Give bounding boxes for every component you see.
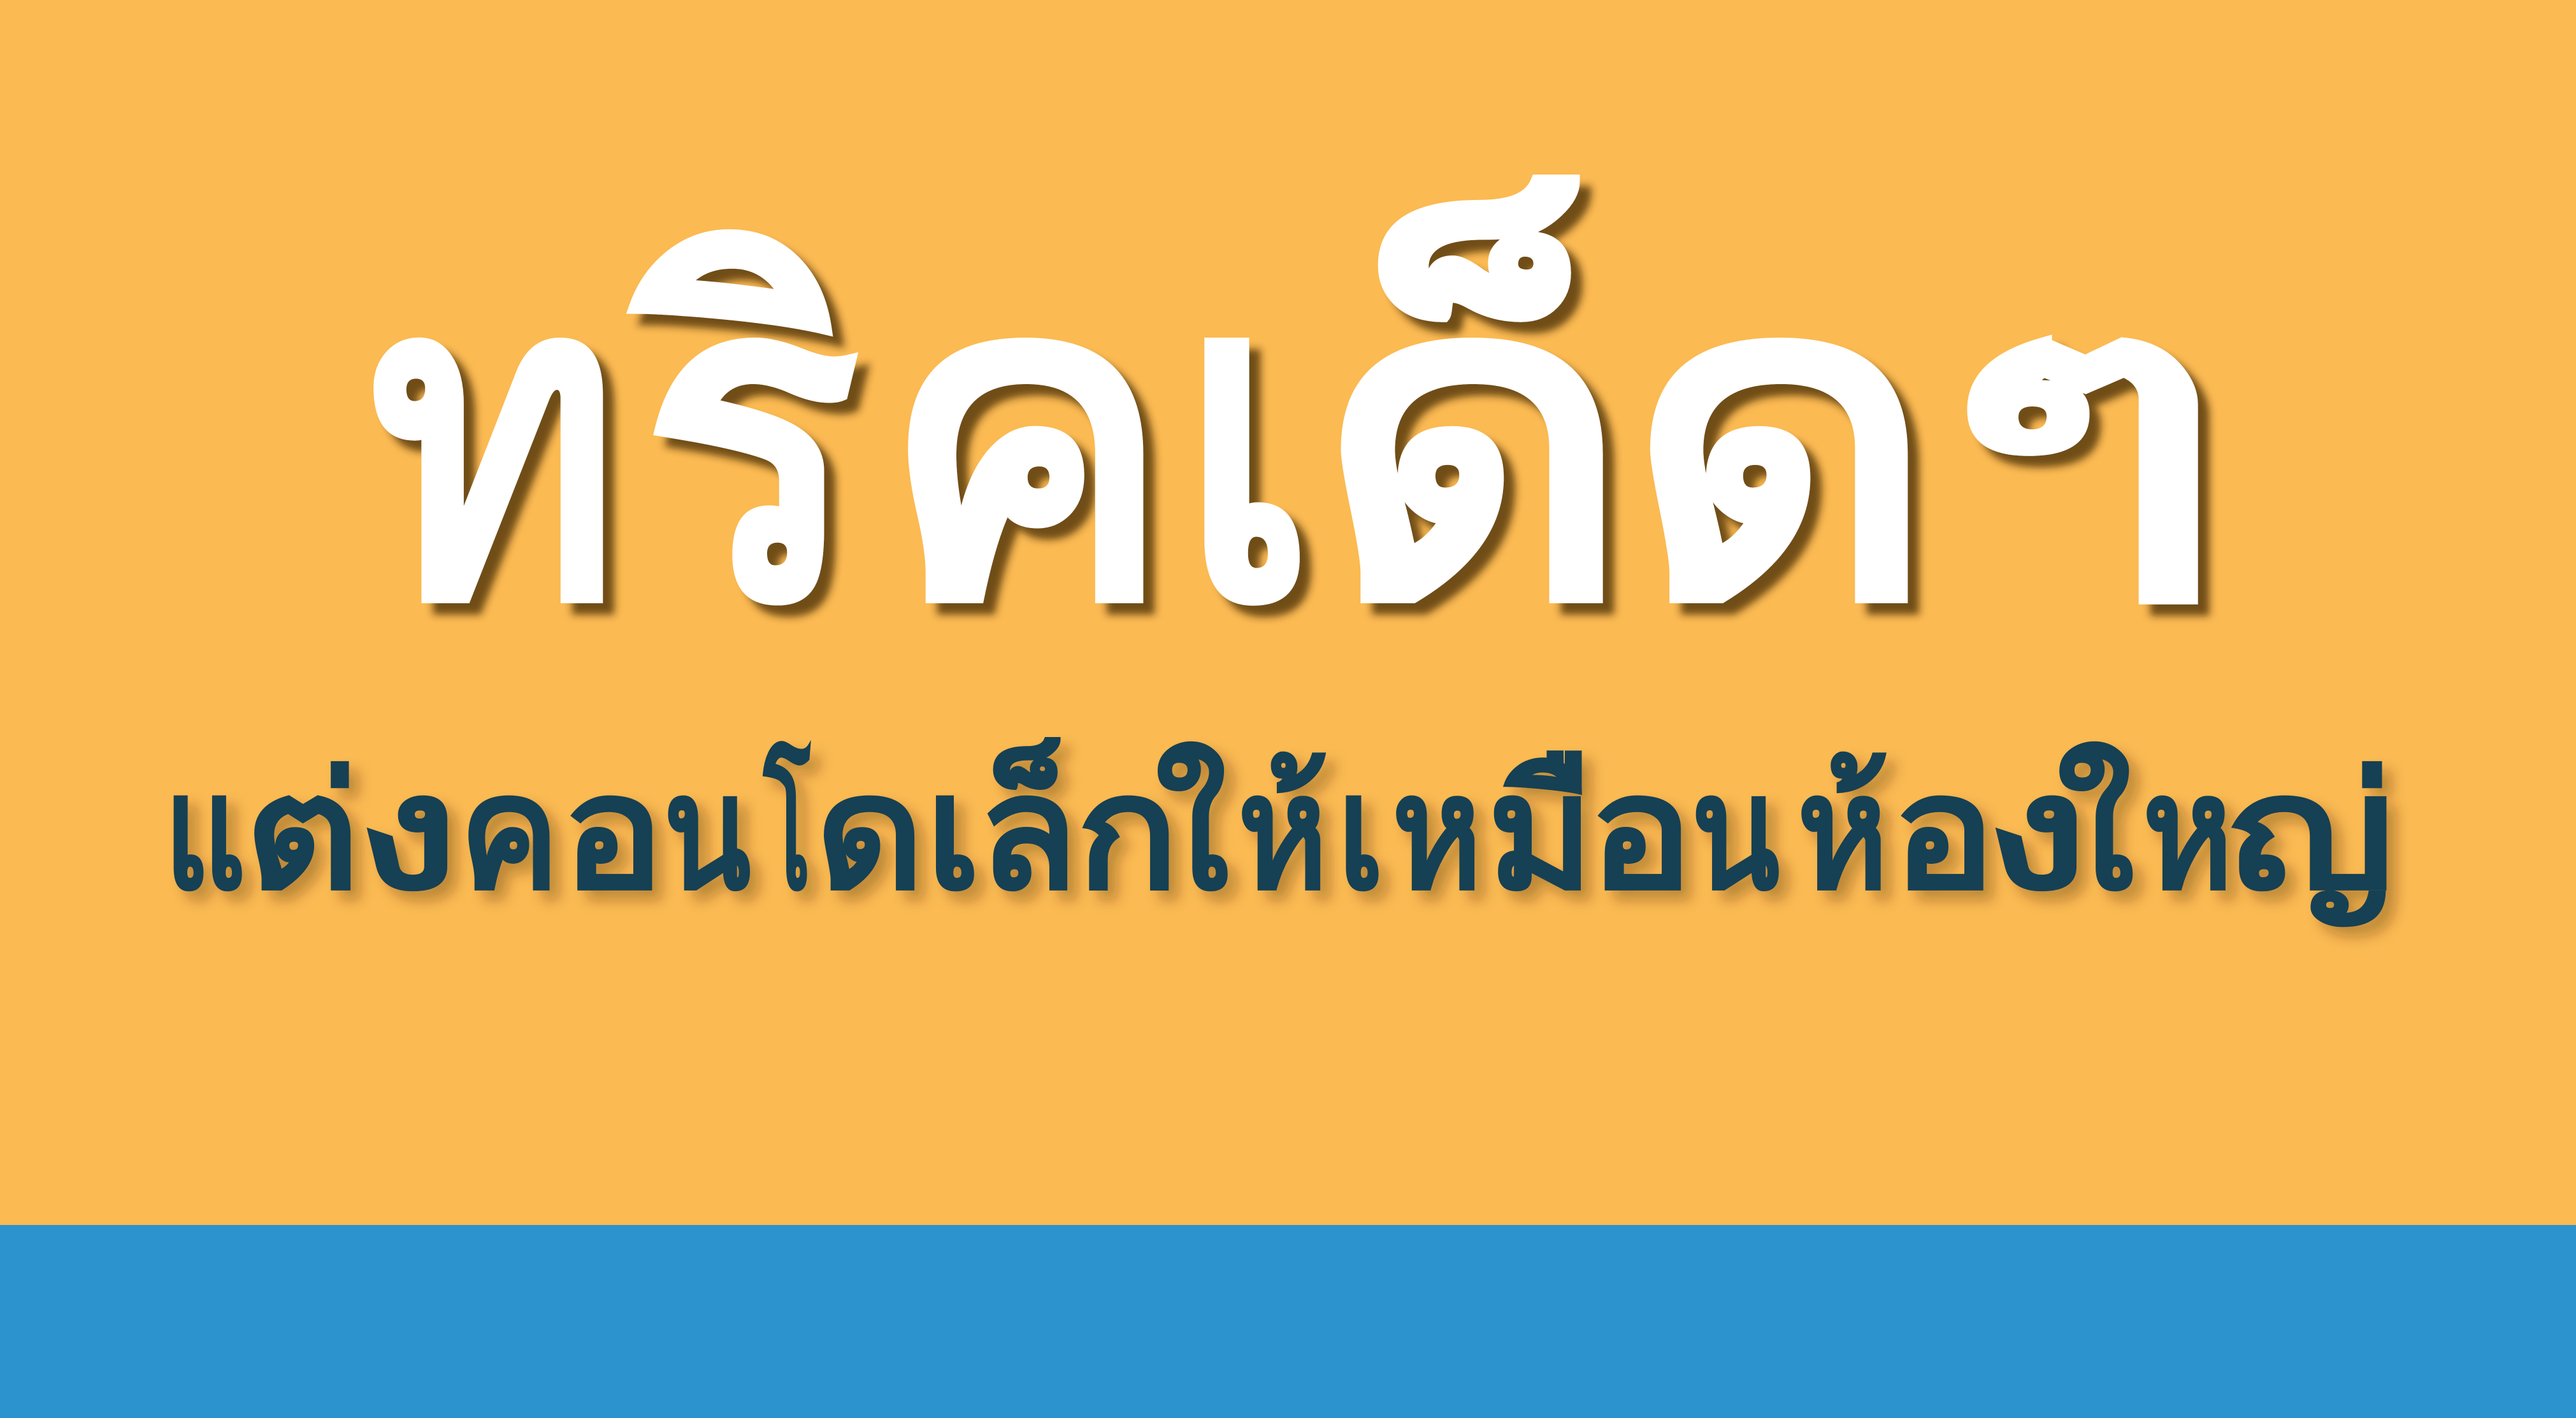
subtitle: ห	[1392, 740, 1483, 926]
subtitle: ง	[1985, 739, 2088, 926]
subtitle	[164, 736, 2395, 928]
footer band: blue	[0, 1225, 2576, 1418]
subtitle: อ	[1892, 740, 1996, 926]
title: ๆ	[1939, 218, 2229, 617]
subtitle: ญ่	[2227, 739, 2395, 928]
title: ท	[368, 180, 622, 702]
subtitle: อ	[1588, 740, 1694, 926]
subtitle: น	[1691, 740, 1780, 926]
subtitle: ก	[1076, 740, 1179, 926]
subtitle: เ	[1337, 739, 1385, 926]
subtitle: ค	[459, 740, 560, 926]
title: เ	[1177, 180, 1317, 702]
subtitle: ล็	[978, 736, 1079, 926]
subtitle: น	[663, 739, 751, 926]
title: ริ	[624, 181, 861, 703]
subtitle: ง	[356, 740, 459, 926]
subtitle: ด	[815, 740, 925, 926]
subtitle: ห	[2142, 739, 2234, 926]
subtitle: มื	[1487, 739, 1594, 926]
subtitle: ต่	[244, 740, 361, 926]
subtitle: ห้	[1797, 739, 1889, 926]
title: ค	[880, 181, 1174, 703]
subtitle: โ	[763, 739, 811, 927]
title	[368, 169, 2229, 703]
subtitle: ห้	[1237, 740, 1328, 926]
title: ด	[1625, 181, 1938, 703]
subtitle: แ	[164, 739, 246, 926]
subtitle: เ	[925, 740, 981, 926]
title: ด็	[1315, 169, 1633, 702]
subtitle: อ	[561, 739, 665, 926]
subtitle: ใ	[1155, 740, 1229, 926]
subtitle: ใ	[2057, 740, 2134, 926]
